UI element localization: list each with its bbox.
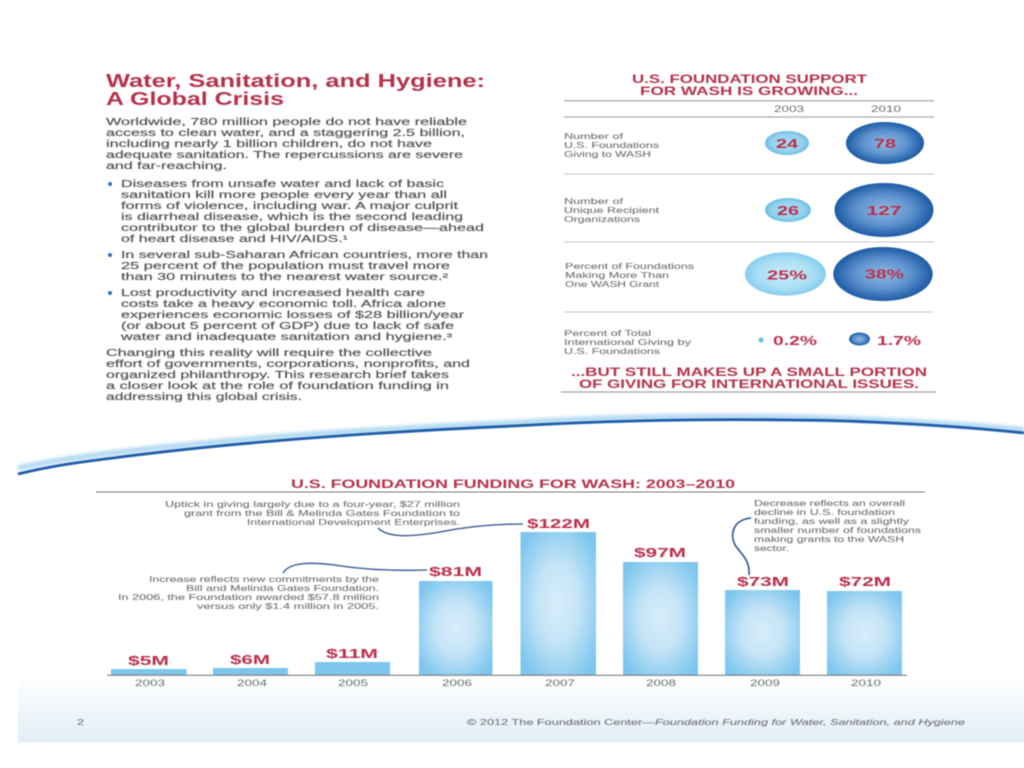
wave divider: [18, 417, 1024, 474]
arrow: 2006 callout line: [283, 563, 427, 573]
heading: support is growing: FOR WASH IS GROWING...: [640, 84, 858, 98]
heading: support is growing: U.S. FOUNDATION SUPPORT: [632, 72, 868, 86]
row: more than one grant: [565, 247, 933, 301]
year axis labels: 2007: [545, 678, 575, 689]
heading: small portion: [571, 365, 927, 391]
bar value labels: $81M: [429, 564, 482, 579]
bar value labels: $72M: [839, 574, 891, 589]
bullet: diseases: sanitation kill more people every year than all: [121, 190, 447, 201]
bar value labels: $5M: [128, 653, 169, 668]
row: recipient organizations: Organizations: [564, 214, 640, 224]
bars: [111, 532, 902, 675]
annotation: 2006 increase: Bill and Melinda Gates Foundation.: [186, 583, 379, 593]
heading: global crisis: Water, Sanitation, and Hygiene:: [106, 71, 485, 91]
heading: support is growing: [632, 72, 868, 98]
bullet: economic toll: costs take a heavy economic toll. Africa alone: [121, 299, 447, 310]
bullet: economic toll: (or about 5 percent of GDP) due to lack of safe: [121, 321, 455, 332]
closing paragraph: Changing this reality will require the collective: [106, 348, 433, 359]
closing paragraph: effort of governments, corporations, nonprofits, and: [106, 359, 470, 370]
bullet: economic toll: experiences economic losses of $28 billion/year: [121, 310, 465, 321]
row: share of international giving: 1.7%: [877, 333, 922, 348]
annotation: 2006 increase: [118, 574, 379, 611]
year axis labels: 2005: [338, 678, 368, 689]
heading: global crisis: A Global Crisis: [106, 89, 284, 109]
intro paragraph: including nearly 1 billion children, do not have: [106, 139, 433, 150]
page background panel: [18, 430, 1024, 742]
row: number of foundations: U.S. Foundations: [564, 140, 659, 150]
bullet: diseases: contributor to the global burden of disease—ahead: [121, 223, 484, 234]
heading: small portion: OF GIVING FOR INTERNATIONAL ISSUES.: [579, 377, 919, 391]
column headers: 2003: [774, 104, 804, 115]
annotation: 2009 decrease: [754, 498, 921, 553]
annotation: 2009 decrease: funding, as well as a slightly: [754, 516, 910, 526]
bar value labels: $73M: [737, 574, 789, 589]
row: more than one grant: 38%: [865, 266, 905, 282]
annotation: 2009 decrease: Decrease reflects an overall: [754, 498, 905, 508]
row: share of international giving: 0.2%: [773, 333, 818, 348]
row: recipient organizations: Unique Recipient: [564, 205, 660, 215]
bar value labels: $6M: [230, 652, 270, 667]
column headers: [774, 104, 901, 115]
bullet: diseases: of heart disease and HIV/AIDS.¹: [121, 234, 349, 245]
row: recipient organizations: 26: [777, 203, 799, 218]
bullet: diseases: forms of violence, including war. A major culprit: [121, 201, 458, 212]
year axis labels: 2003: [135, 678, 165, 689]
closing paragraph: organized philanthropy. This research brief takes: [106, 370, 449, 381]
bullet: economic toll: [108, 288, 465, 343]
row: share of international giving: International Giving by: [564, 337, 692, 347]
row: number of foundations: [564, 122, 924, 164]
row: more than one grant: Percent of Foundations: [565, 261, 694, 271]
row: share of international giving: U.S. Foundations: [564, 346, 660, 356]
annotation: 2007 uptick: Uptick in giving largely due to a four-year, $27 million: [165, 499, 460, 509]
bar value labels: $122M: [527, 516, 590, 531]
bar value labels: $97M: [634, 545, 686, 560]
annotation: 2006 increase: versus only $1.4 million in 2005.: [197, 601, 379, 611]
bullet: diseases: [108, 179, 484, 245]
annotation: 2007 uptick: [165, 499, 460, 527]
year axis labels: 2008: [646, 678, 676, 689]
intro paragraph: Worldwide, 780 million people do not have reliable: [106, 117, 468, 128]
year axis labels: [135, 678, 881, 689]
bullet: economic toll: water and inadequate sanitation and hygiene.³: [119, 332, 453, 343]
row: more than one grant: Making More Than: [565, 270, 669, 280]
closing paragraph: addressing this global crisis.: [106, 392, 302, 403]
bullet: diseases: Diseases from unsafe water and lack of basic: [121, 179, 444, 190]
closing paragraph: a closer look at the role of foundation funding in: [106, 381, 449, 392]
closing paragraph: [106, 348, 470, 403]
row: recipient organizations: [564, 183, 934, 237]
year axis labels: 2009: [750, 678, 780, 689]
year axis labels: 2010: [851, 678, 881, 689]
heading: global crisis: [106, 71, 485, 109]
annotation: 2006 increase: In 2006, the Foundation awarded $57.8 million: [118, 592, 379, 602]
annotation: 2009 decrease: smaller number of foundations: [754, 525, 921, 535]
panel: funding bar chart: [96, 477, 925, 689]
row: number of foundations: Giving to WASH: [564, 149, 651, 159]
intro paragraph: adequate sanitation. The repercussions are severe: [106, 150, 464, 161]
row: recipient organizations: Number of: [564, 196, 624, 206]
bullet: travel to water: 25 percent of the population must travel more: [121, 261, 451, 272]
annotation: 2009 decrease: making grants to the WASH: [754, 534, 904, 544]
annotation: 2007 uptick: grant from the Bill & Melinda Gates Foundation to: [184, 508, 460, 518]
year axis labels: 2006: [442, 678, 472, 689]
footer credit: © 2012 The Foundation Center— Foundation Funding for Water, Sanitation, and Hygiene: [467, 717, 965, 727]
heading: small portion: ...BUT STILL MAKES UP A SMALL PORTION: [571, 365, 927, 379]
arrow: 2009 callout line: [733, 518, 751, 575]
panel: global crisis text: [106, 71, 488, 403]
bullet: economic toll: Lost productivity and increased health care: [121, 288, 426, 299]
row: more than one grant: One WASH Grant: [565, 279, 660, 289]
bar value labels: [128, 516, 891, 668]
column headers: 2010: [871, 104, 901, 115]
arrow: 2007 callout line: [378, 524, 523, 536]
panel: foundation support table: [561, 72, 936, 392]
annotation: 2007 uptick: International Development Enterprises.: [247, 517, 460, 527]
bullet: travel to water: [108, 250, 488, 283]
chart title: U.S. FOUNDATION FUNDING FOR WASH: 2003–2010: [291, 477, 735, 491]
bullet: travel to water: In several sub-Saharan African countries, more than: [121, 250, 488, 261]
bar value labels: $11M: [326, 646, 378, 661]
year axis labels: 2004: [237, 678, 267, 689]
row: recipient organizations: 127: [866, 203, 902, 218]
annotation: 2009 decrease: sector.: [754, 543, 789, 553]
row: number of foundations: 78: [874, 136, 896, 151]
row: share of international giving: Percent of Total: [564, 328, 651, 338]
annotation: 2009 decrease: decline in U.S. foundation: [754, 507, 895, 517]
bullet: travel to water: than 30 minutes to the nearest water source.²: [121, 272, 449, 283]
intro paragraph: [106, 117, 468, 172]
row: more than one grant: 25%: [767, 268, 808, 282]
page number: 2: [77, 717, 84, 727]
intro paragraph: and far-reaching.: [106, 161, 227, 172]
annotation: 2006 increase: Increase reflects new commitments by the: [149, 574, 379, 584]
row: share of international giving: [564, 328, 922, 356]
row: number of foundations: Number of: [564, 131, 624, 141]
intro paragraph: access to clean water, and a staggering 2.5 billion,: [106, 128, 465, 139]
bullet: diseases: is diarrheal disease, which is the second leading: [121, 212, 463, 223]
row: number of foundations: 24: [776, 136, 799, 151]
